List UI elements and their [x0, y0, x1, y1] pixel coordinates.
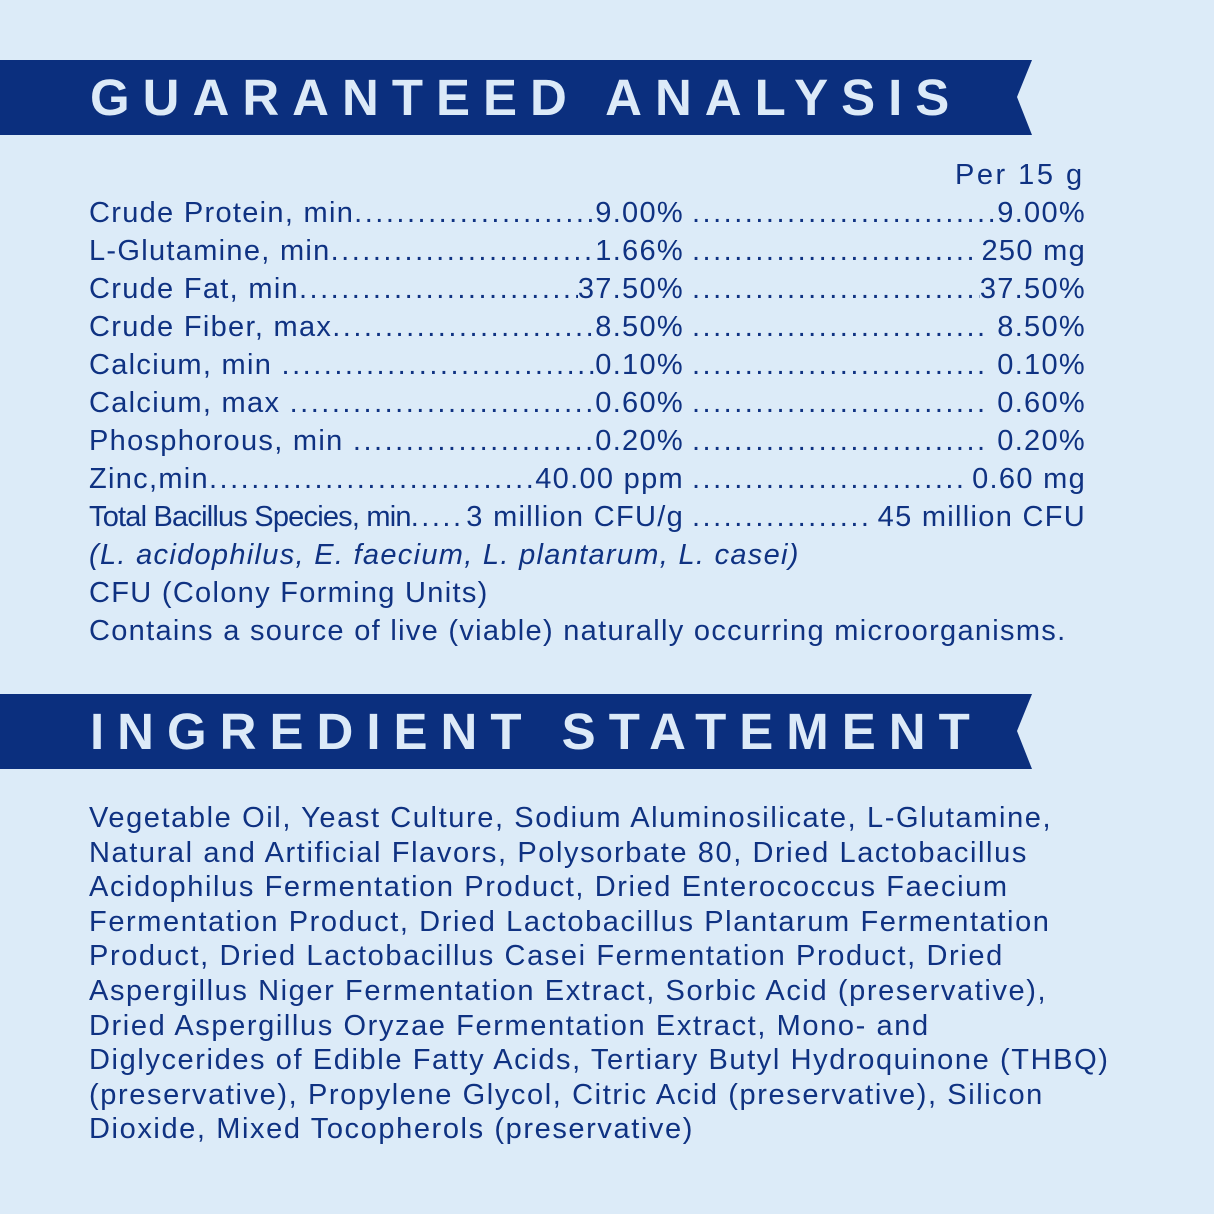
analysis table: Zinc,min — [89, 463, 209, 495]
analysis table: Calcium, min — [89, 349, 272, 381]
ingredient text: Product, Dried Lactobacillus Casei Fermentation Product, Dried — [89, 940, 1004, 972]
ingredient text — [89, 802, 1110, 1145]
banner: ingredient statement: INGREDIENT STATEMENT — [90, 703, 983, 760]
CFU note: CFU (Colony Forming Units) — [89, 577, 489, 609]
analysis table: Crude Fiber, max — [89, 311, 332, 343]
banner: guaranteed analysis: GUARANTEED ANALYSIS — [90, 69, 962, 126]
analysis table: 250 mg — [981, 235, 1086, 267]
ingredient text: Aspergillus Niger Fermentation Extract, Sorbic Acid (preservative), — [89, 975, 1047, 1007]
analysis table: 0.60% — [997, 387, 1086, 419]
ingredient text: Fermentation Product, Dried Lactobacillus Plantarum Fermentation — [89, 906, 1051, 938]
analysis table: 9.00% — [997, 197, 1086, 229]
analysis table: Crude Protein, min — [89, 197, 354, 229]
analysis table: Calcium, max — [89, 387, 280, 419]
ingredient text: Natural and Artificial Flavors, Polysorbate 80, Dried Lactobacillus — [89, 837, 1028, 869]
analysis table: 3 million CFU/g — [466, 501, 684, 533]
ingredient text: Acidophilus Fermentation Product, Dried Enterococcus Faecium — [89, 871, 1009, 903]
analysis table: 40.00 ppm — [535, 463, 684, 495]
banner: ingredient statement — [0, 694, 1032, 769]
analysis table: 0.10% — [997, 349, 1086, 381]
ingredient text: Vegetable Oil, Yeast Culture, Sodium Aluminosilicate, L-Glutamine, — [89, 802, 1052, 834]
species note: (L. acidophilus, E. faecium, L. plantarum, L. casei) — [89, 539, 800, 571]
analysis table: 37.50% — [980, 273, 1086, 305]
analysis table: 37.50% — [578, 273, 684, 305]
analysis table: L-Glutamine, min — [89, 235, 331, 267]
analysis table: 0.60 mg — [972, 463, 1086, 495]
analysis table — [89, 197, 1086, 533]
analysis table: 0.20% — [595, 425, 684, 457]
analysis table: 8.50% — [595, 311, 684, 343]
ingredient text: Diglycerides of Edible Fatty Acids, Tertiary Butyl Hydroquinone (THBQ) — [89, 1044, 1110, 1076]
analysis table: 9.00% — [595, 197, 684, 229]
live microorganisms note: Contains a source of live (viable) naturally occurring microorganisms. — [89, 615, 1066, 647]
banner: guaranteed analysis — [0, 60, 1032, 135]
analysis table: 1.66% — [595, 235, 684, 267]
analysis table: Phosphorous, min — [89, 425, 344, 457]
analysis table: 0.10% — [595, 349, 684, 381]
analysis table: 45 million CFU — [878, 501, 1086, 533]
analysis table: 0.20% — [997, 425, 1086, 457]
ingredient text: Dried Aspergillus Oryzae Fermentation Extract, Mono- and — [89, 1010, 930, 1042]
ingredient text: Dioxide, Mixed Tocopherols (preservative) — [89, 1113, 694, 1145]
analysis table: 0.60% — [595, 387, 684, 419]
analysis table: 8.50% — [997, 311, 1086, 343]
analysis table: Crude Fat, min — [89, 273, 299, 305]
analysis table: Total Bacillus Species, min — [89, 501, 411, 533]
ingredient text: (preservative), Propylene Glycol, Citric Acid (preservative), Silicon — [89, 1079, 1044, 1111]
column header: Per 15 g — [955, 159, 1085, 191]
